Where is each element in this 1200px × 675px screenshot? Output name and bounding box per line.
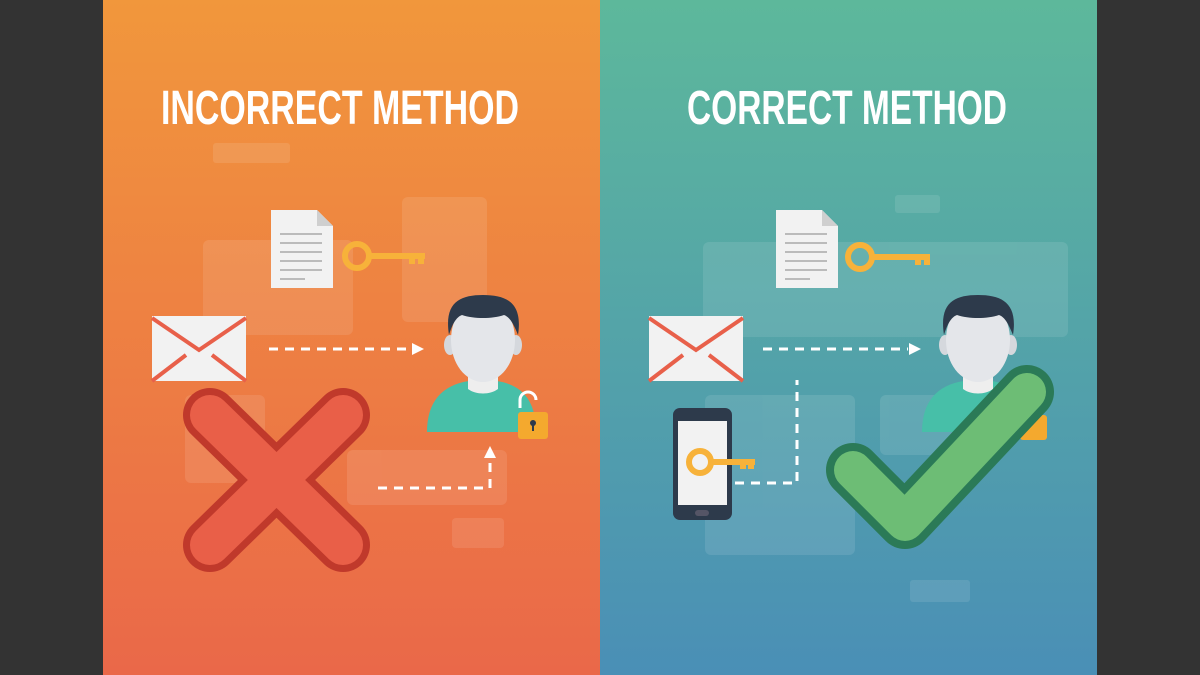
icon: envelope (649, 316, 743, 381)
arrow: email to user (763, 343, 921, 355)
arrow: bypass path (378, 446, 496, 488)
icon: key (848, 245, 930, 269)
icon: document (271, 210, 333, 288)
icon: user with lock (922, 295, 1047, 440)
panel: incorrect method (103, 0, 600, 675)
icon: green check (853, 392, 1027, 522)
icon: user with open lock (427, 295, 548, 439)
title: correct method: CORRECT METHOD (687, 82, 1007, 135)
icon: red X (210, 415, 343, 545)
icon: key (345, 244, 425, 268)
arrow: email to user (269, 343, 424, 355)
icon: phone with key (673, 408, 755, 520)
panel: correct method (600, 0, 1097, 675)
icon: document (776, 210, 838, 288)
title: incorrect method: INCORRECT METHOD (161, 82, 519, 135)
icon: envelope (152, 316, 246, 381)
arrow: phone to user (735, 380, 797, 483)
